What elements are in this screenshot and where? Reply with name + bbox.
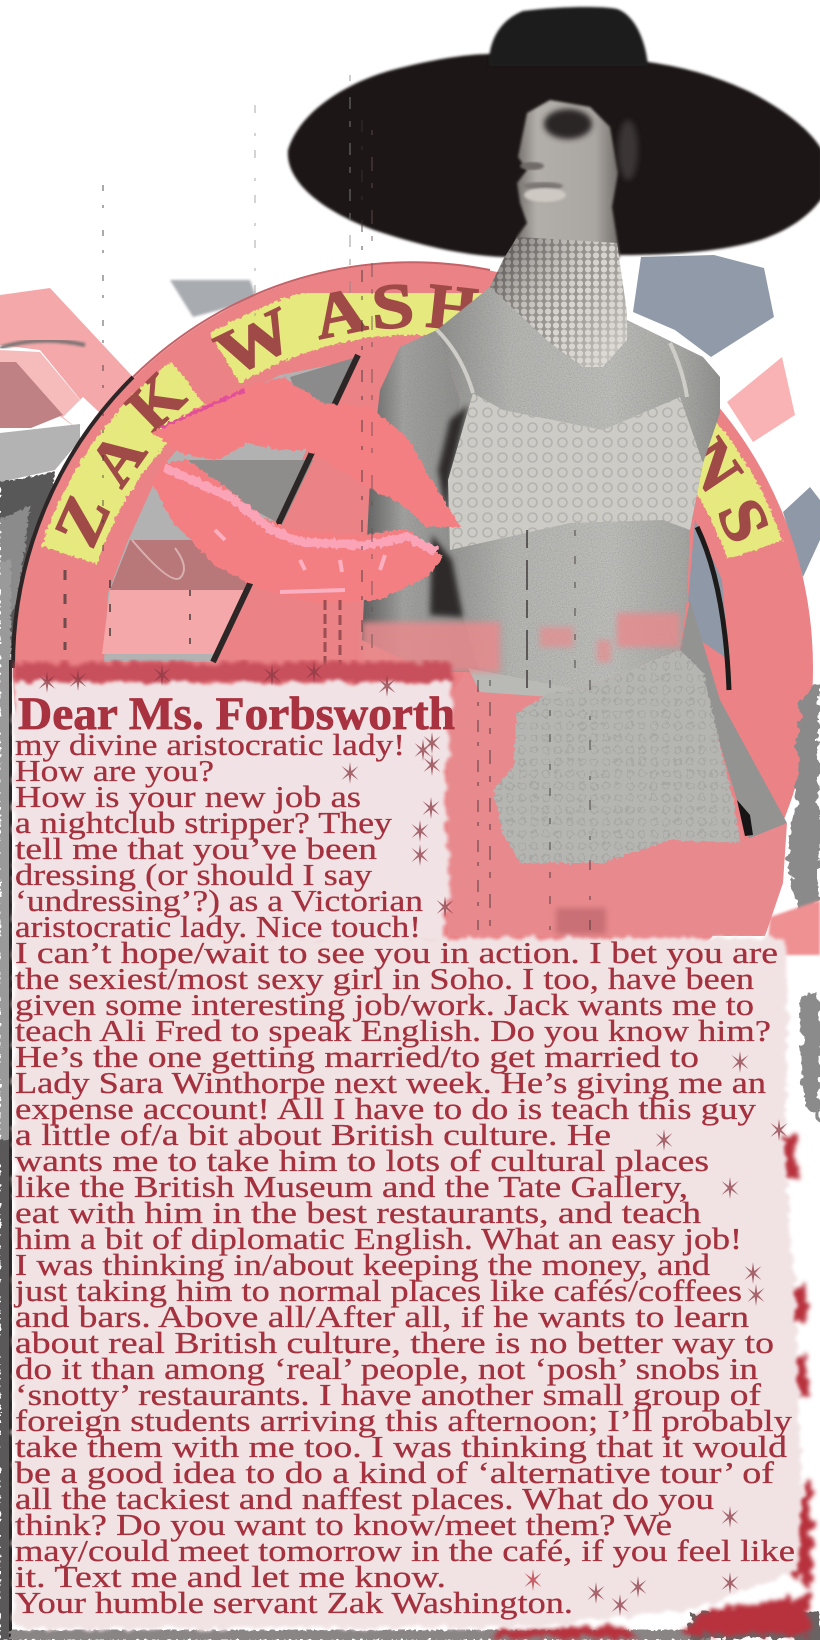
text block: main letter, wide column: it. Text me and let me know. xyxy=(15,1559,446,1594)
face xyxy=(517,100,638,258)
text block: main letter, wide column: about real British culture, there is no better way to xyxy=(15,1325,774,1360)
ring label text: ZAK WASH ... NS: N xyxy=(671,426,756,504)
ring label text: ZAK WASH ... NS: S xyxy=(370,270,416,343)
text block: greeting, narrow column: aristocratic lady. Nice touch! xyxy=(15,909,421,944)
ring label: yellow blocks xyxy=(69,306,755,555)
hat brim xyxy=(288,54,820,257)
red blotches right of lower paper xyxy=(490,1135,812,1638)
text block: main letter, wide column: He’s the one getting married/to get married to xyxy=(15,1039,699,1074)
text block: main letter, wide column: do it than among ‘real’ people, not ‘posh’ snobs in xyxy=(15,1351,759,1386)
hair xyxy=(618,120,638,180)
bra straps xyxy=(437,330,687,397)
text block: main letter, wide column: I was thinking in/about keeping the money, and xyxy=(15,1247,711,1282)
lip flecks xyxy=(215,530,385,592)
text block: main letter, wide column: teach Ali Fred to speak English. Do you know him? xyxy=(15,1013,771,1048)
decorative stars xyxy=(38,661,788,1616)
pearl necklace xyxy=(490,237,627,367)
lip highlight xyxy=(165,468,436,552)
text block: main letter, wide column: take them with me too. I was thinking that it would xyxy=(15,1429,788,1464)
text block: main letter, wide column: the sexiest/most sexy girl in Soho. I too, have been xyxy=(15,961,755,996)
text block: main letter, wide column: think? Do you want to know/meet them? We xyxy=(15,1507,672,1542)
ring label text: ZAK WASH ... NS: H xyxy=(424,270,481,346)
right arm xyxy=(680,600,787,842)
left arm xyxy=(362,330,480,672)
background collage: left pink and grey shapes xyxy=(0,280,257,660)
text block: main letter, wide column: be a good idea to do a kind of ‘alternative tour’ of xyxy=(15,1455,775,1490)
hat xyxy=(288,7,820,257)
text block: greeting, narrow column: ‘undressing’?) as a Victorian xyxy=(15,883,424,918)
text block: main letter, wide column: I can’t hope/wait to see you in action. I bet you are xyxy=(15,935,778,970)
lips xyxy=(152,377,460,603)
lower lip xyxy=(152,460,443,603)
text block: main letter, wide column: Your humble servant Zak Washington. xyxy=(15,1585,573,1620)
red torn top band xyxy=(16,662,452,684)
pink hips xyxy=(448,655,787,936)
black gap at arm xyxy=(737,800,753,836)
text block: main letter, wide column: and bars. Above all/After all, if he wants to learn xyxy=(15,1299,750,1334)
text block: main letter, wide column: just taking him to normal places like cafés/coffees xyxy=(14,1273,742,1308)
armpit and back shadows xyxy=(430,405,468,617)
ring label text: ZAK WASH ... NS: A xyxy=(308,273,372,353)
paperclip xyxy=(132,540,184,579)
background collage: right grey hexagon and pink bars xyxy=(633,255,820,577)
upper lip xyxy=(152,377,460,527)
text block: main letter, wide column: like the British Museum and the Tate Gallery, xyxy=(15,1169,688,1204)
text block: main letter, wide column: eat with him in the best restaurants, and teach xyxy=(15,1195,702,1230)
text block: main letter, wide column: wants me to take him to lots of cultural places xyxy=(15,1143,709,1178)
girdle lace xyxy=(493,650,740,863)
text block: greeting, narrow column: dressing (or should I say xyxy=(15,857,373,892)
hat crown xyxy=(489,7,648,66)
torso xyxy=(437,287,720,690)
heading: Dear Ms. Forbsworth: Dear Ms. Forbsworth xyxy=(18,688,455,740)
scratches xyxy=(65,75,590,930)
right edge grunge xyxy=(767,680,820,1130)
text block: greeting, narrow column: How are you? xyxy=(15,753,214,788)
text block: greeting, narrow column: my divine aristocratic lady! xyxy=(15,727,405,762)
ring label text: ZAK WASH ... NS: K xyxy=(113,359,198,444)
bottom edge grunge xyxy=(10,1612,820,1640)
text block: greeting, narrow column: a nightclub stripper? They xyxy=(15,805,393,840)
ring inner window: grey, rose and pink bands xyxy=(102,355,729,690)
text block: main letter, wide column: him a bit of diplomatic English. What an easy job! xyxy=(15,1221,742,1256)
girdle top band xyxy=(468,650,703,700)
text block: greeting, narrow column xyxy=(15,727,424,944)
nostril shadow xyxy=(520,162,544,170)
pink washes over midriff xyxy=(362,613,680,672)
text block: main letter, wide column: expense account! All I have to do is teach this guy xyxy=(15,1091,757,1126)
ring label text: ZAK WASH ... NS: A xyxy=(75,419,159,498)
text block: main letter, wide column xyxy=(14,935,795,1620)
mouth xyxy=(523,182,566,202)
model figure xyxy=(362,287,787,936)
panel: letter paper xyxy=(14,661,812,1638)
text block: main letter, wide column: given some interesting job/work. Jack wants me to xyxy=(15,987,754,1022)
text block: main letter, wide column: may/could meet tomorrow in the café, if you feel like xyxy=(15,1533,795,1568)
text block: main letter, wide column: all the tackiest and naffest places. What do you xyxy=(15,1481,714,1516)
eye xyxy=(544,109,592,139)
text block: main letter, wide column: a little of/a bit about British culture. He xyxy=(15,1117,611,1152)
text block: greeting, narrow column: How is your new job as xyxy=(15,779,361,814)
pink ring xyxy=(13,262,813,1073)
ring label text: ZAK WASH ... NS xyxy=(40,270,785,557)
text block: main letter, wide column: ‘snotty’ restaurants. I have another small group of xyxy=(15,1377,762,1412)
upper paper xyxy=(14,682,452,942)
lower paper xyxy=(14,938,802,1629)
text block: greeting, narrow column: tell me that you’ve been xyxy=(15,831,378,866)
text block: main letter, wide column: Lady Sara Winthorpe next week. He’s giving me an xyxy=(15,1065,767,1100)
text block: main letter, wide column: foreign students arriving this afternoon; I’ll probably xyxy=(15,1403,793,1438)
ring label text: ZAK WASH ... NS: S xyxy=(704,488,785,553)
magenta lip edge xyxy=(160,390,245,428)
ring label text: ZAK WASH ... NS: W xyxy=(205,294,305,391)
bra xyxy=(448,393,703,550)
crotch shadow xyxy=(556,908,606,934)
ring label text: ZAK WASH ... NS: Z xyxy=(40,485,124,557)
left edge grunge strip xyxy=(0,560,12,1640)
